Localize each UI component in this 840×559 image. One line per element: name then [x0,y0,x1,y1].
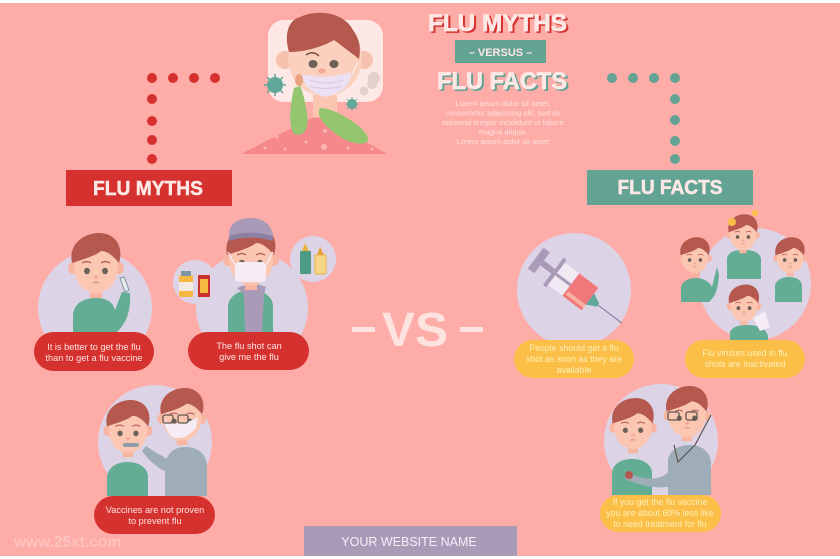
caption [606,497,714,529]
caption: to need treatment for flu [613,519,707,529]
fact 1: get shot soon [514,233,634,378]
footer: website name: YOUR WEBSITE NAME [341,535,477,549]
myth 3: vaccines not proven [94,385,215,534]
watermark: www.25xt.com [13,534,121,551]
intro text: magna aliqua. [479,128,527,136]
caption [45,342,143,363]
heading: flu myths: FLU MYTHS [93,178,203,200]
label: versus: – VERSUS – [469,47,532,59]
icon: virus [264,74,286,96]
illustration: sick child in bed [241,13,387,154]
caption: The flu shot can [216,341,282,351]
caption [216,341,282,362]
title: flu myths: FLU MYTHS [430,12,569,38]
intro text: Lorem ipsum dolor sit amet, [456,99,550,108]
caption: to prevent flu [128,516,182,526]
caption [702,348,788,369]
caption: Flu viruses used in flu [702,348,788,358]
myth 1: better to get the flu [34,233,154,371]
fact 2: inactivated viruses [678,210,811,378]
dotted connector: myths [147,73,220,164]
caption: If you get the flu vaccine [613,497,708,507]
figure: boy right [773,237,807,302]
title: flu facts: FLU FACTS [439,70,569,96]
caption: you are about 60% less like [606,508,714,518]
dotted connector: facts [607,73,680,164]
figure: boy left [678,237,719,302]
caption [526,343,622,375]
icon: syringe [525,245,632,337]
caption: shots are inactivated [705,359,785,369]
title: flu myths: FLU MYTHS [428,10,567,37]
icon: medicine bottles [179,243,326,297]
vs divider: VS [382,304,448,357]
myth 2: flu shot gives flu [173,218,336,370]
figure: boy top [726,210,761,279]
footer: website name [304,526,517,556]
caption: than to get a flu vaccine [45,353,143,363]
intro text: consectetur adipiscing elit, sed do [445,108,561,118]
heading: flu facts: FLU FACTS [618,177,722,199]
caption: Vaccines are not proven [106,505,204,515]
intro text: Lorem ipsum dolor sit amet [457,137,550,146]
icon: small virus [345,97,359,111]
figure: boy with thermometer [68,233,130,332]
figure: boy with hat and mask [223,218,279,332]
figure: doctor and boy [103,388,207,496]
figure: doctor with stethoscope and boy [609,386,711,495]
caption [106,505,204,526]
fact 3: 60% less likely [600,384,721,532]
caption: People should get a flu [529,343,619,353]
caption: shot as soon as they are [526,354,622,364]
intro text: euismod tempor incididunt ut labore [442,118,564,127]
heading: flu myths [66,170,232,206]
figure: boy bottom [727,285,770,340]
caption: give me the flu [219,352,279,362]
caption: It is better to get the flu [47,342,141,352]
icon: sneeze puff [360,72,380,96]
caption: available [557,365,591,375]
heading: flu facts [587,170,753,205]
intro text [442,99,564,146]
title: flu facts: FLU FACTS [437,68,567,95]
title block [428,10,569,146]
vs divider [352,304,483,357]
label: versus [455,40,546,63]
